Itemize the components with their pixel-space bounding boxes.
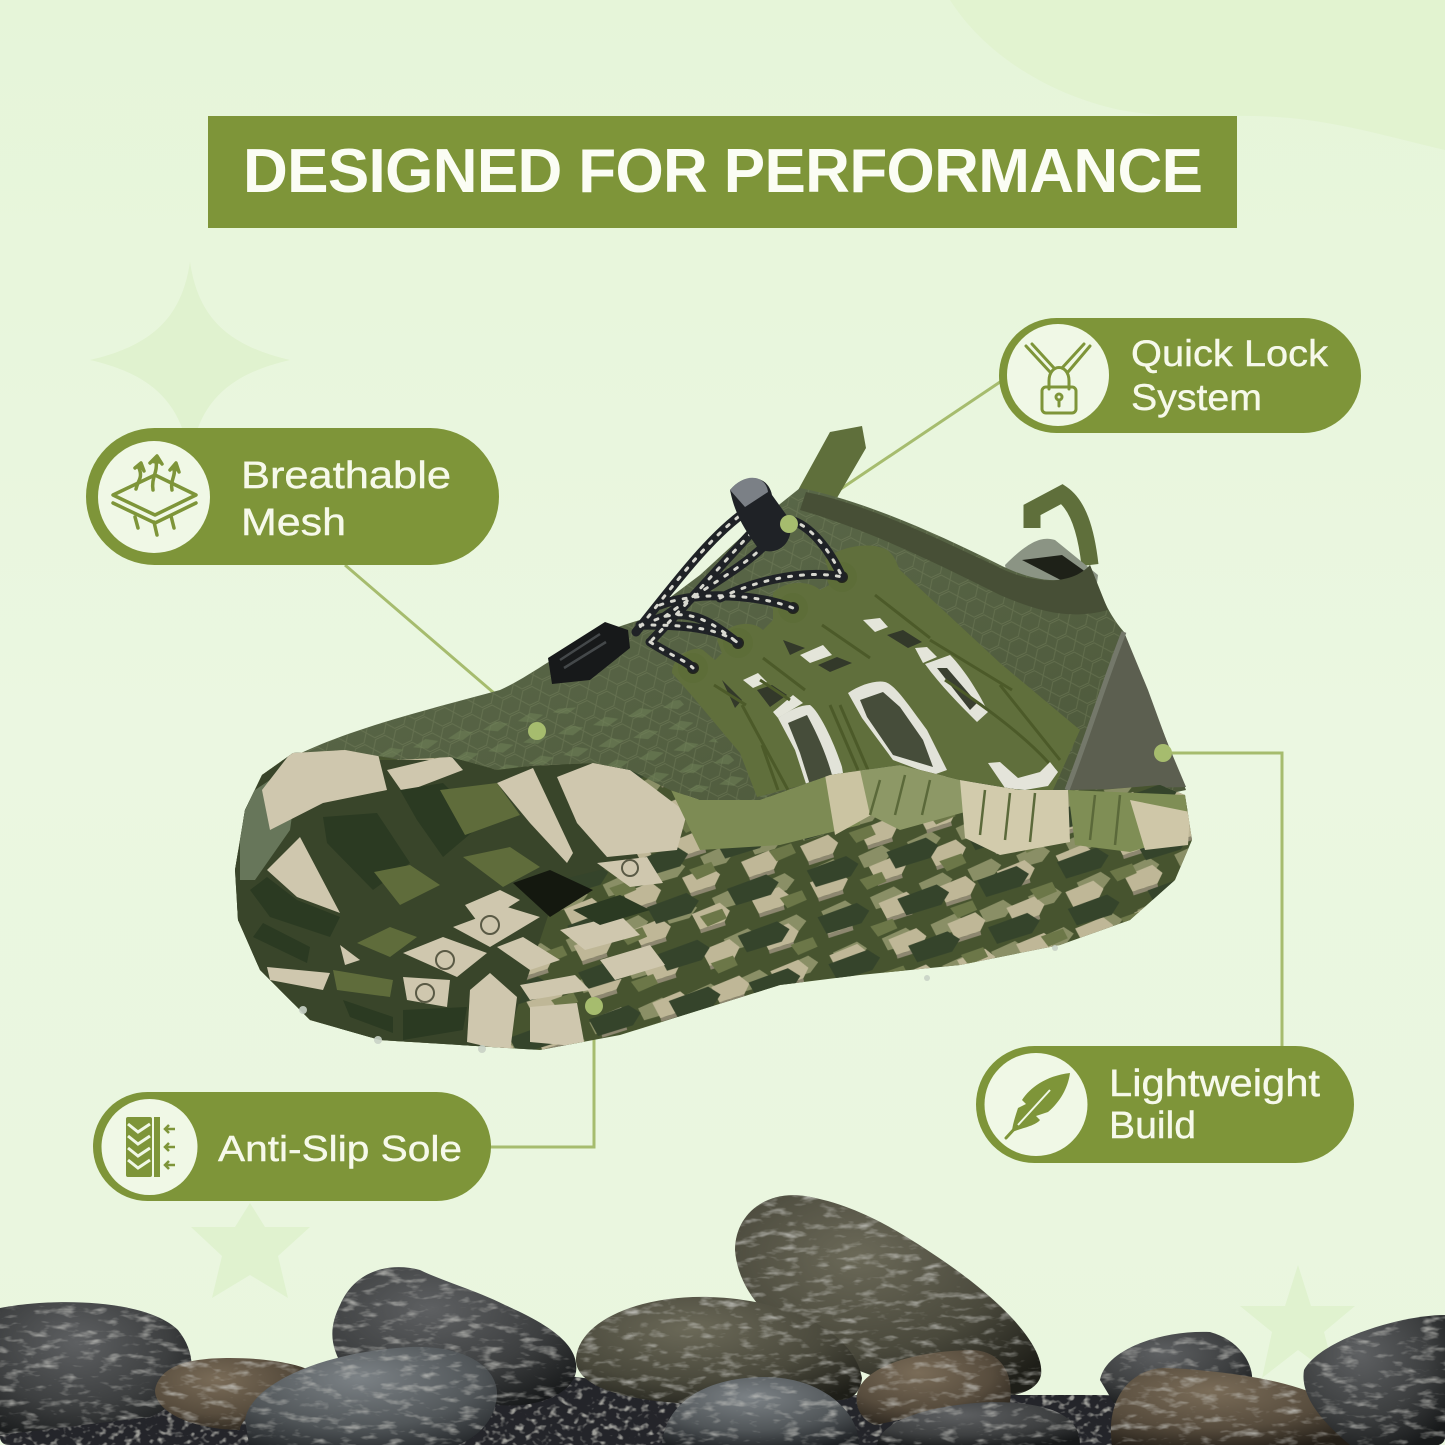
window 3 — [925, 655, 988, 722]
screw marks — [416, 860, 638, 1002]
callout: breathable mesh: Mesh — [241, 502, 346, 544]
label: Breathable — [241, 455, 451, 497]
connector: anti-slip — [490, 1006, 594, 1147]
toe pull loop — [786, 426, 866, 530]
lug pattern — [235, 751, 1189, 1049]
title banner — [208, 116, 1237, 228]
toe base — [235, 760, 640, 1060]
collar binding — [800, 492, 1108, 614]
connector: lightweight — [1163, 753, 1282, 1047]
dot: anti-slip sole — [585, 997, 603, 1015]
callout: quick lock system: System — [1131, 377, 1262, 418]
rock: small brown left — [155, 1358, 309, 1430]
lace end clip — [548, 622, 630, 684]
callout: lightweight build — [976, 1046, 1354, 1163]
rock: blue grey — [245, 1347, 497, 1445]
icon: breathable layers with arrows — [113, 456, 196, 535]
dot: lightweight — [1154, 744, 1172, 762]
decorative star: lower left — [191, 1203, 310, 1298]
dot: breathable mesh — [528, 722, 546, 740]
toe chevrons — [290, 700, 770, 800]
window 2 — [848, 682, 947, 775]
label: Lightweight — [1109, 1063, 1320, 1105]
callout: lightweight build: Build — [1109, 1105, 1196, 1147]
cage dark slots — [722, 630, 922, 708]
rock: dark front — [877, 1402, 1080, 1445]
decorative star: lower right — [1240, 1265, 1355, 1378]
callout: breathable mesh — [86, 428, 499, 565]
connector: quick lock — [790, 380, 1003, 523]
rock: center — [576, 1297, 862, 1404]
shoe inner collar — [1005, 539, 1098, 640]
icon: padlock with laces — [1026, 344, 1090, 413]
callout: quick lock system — [999, 318, 1361, 433]
heel pull loop — [1032, 494, 1090, 565]
side cage — [672, 545, 1080, 797]
lace lock toggle — [730, 478, 791, 551]
cage rib grooves — [714, 595, 1060, 790]
shoe illustration — [225, 426, 1205, 1060]
rock: right dark — [1100, 1332, 1252, 1405]
icon: feather — [1006, 1073, 1070, 1138]
toe lugs olive — [333, 783, 540, 997]
laces — [636, 510, 842, 668]
icon: tread with arrows — [126, 1117, 175, 1177]
connector: breathable mesh — [345, 565, 537, 730]
decorative blob: top right — [950, 0, 1445, 150]
rim colour bands — [670, 772, 860, 850]
decorative sparkle star — [90, 262, 290, 460]
shoe upper mesh — [262, 488, 1186, 830]
rock: far left — [0, 1302, 192, 1435]
gravel ground — [0, 1375, 1445, 1445]
title text: DESIGNED FOR PERFORMANCE — [243, 137, 1203, 206]
rock: tall leaning — [735, 1195, 1041, 1395]
rock: grey pebble — [662, 1377, 859, 1445]
outsole camo — [225, 735, 1205, 1060]
rock: upper left dark — [332, 1267, 576, 1406]
dot: quick lock — [780, 515, 798, 533]
tongue strap — [695, 555, 790, 612]
label: Quick Lock — [1131, 333, 1329, 374]
rock: brown center — [857, 1350, 1011, 1425]
river rocks — [0, 1195, 1445, 1445]
rock: far right — [1303, 1315, 1445, 1445]
toe lugs cream — [262, 750, 687, 1052]
toe lugs dark — [250, 783, 650, 1040]
window 1 — [778, 705, 845, 790]
label: Anti-Slip Sole — [218, 1128, 462, 1169]
rock: right brown — [1111, 1368, 1358, 1445]
water droplets — [299, 945, 1058, 1053]
heel counter — [1067, 632, 1186, 790]
cage white accents — [743, 618, 937, 718]
eyelets — [678, 653, 708, 683]
X logo on heel side — [988, 762, 1058, 790]
callout: anti-slip sole — [93, 1092, 491, 1201]
